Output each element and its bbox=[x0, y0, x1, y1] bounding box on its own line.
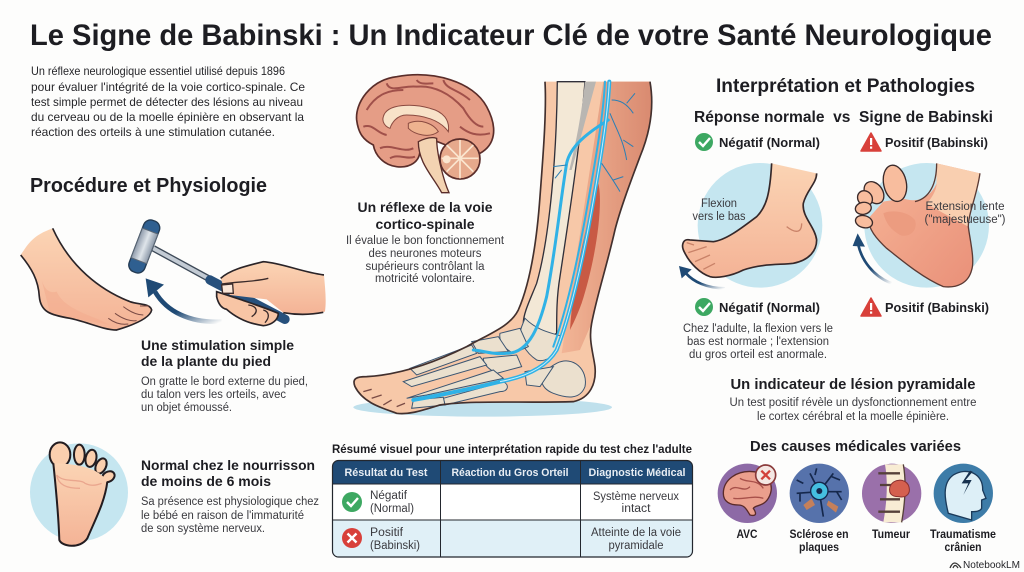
illustration: leg anatomy bbox=[353, 82, 652, 417]
heading: causes: Des causes médicales variées bbox=[750, 439, 961, 455]
status row top: Négatif (Normal) bbox=[719, 135, 820, 150]
status row bottom: Positif (Babinski) bbox=[885, 300, 989, 315]
text: simple stimulation bbox=[141, 337, 308, 414]
labels: causes: crânien bbox=[944, 542, 982, 554]
credit: NotebookLM: NotebookLM bbox=[963, 560, 1020, 571]
text: simple stimulation: de la plante du pied bbox=[141, 353, 271, 369]
text: normal in infants: Normal chez le nourrisson bbox=[141, 457, 315, 473]
illustration: baby foot bbox=[30, 442, 128, 546]
nerves bbox=[413, 82, 609, 400]
table header: Résultat du Test bbox=[344, 467, 428, 479]
text: adult response: Chez l'adulte, la flexion vers le bbox=[683, 323, 833, 335]
icon: red warning bbox=[861, 133, 881, 151]
table header bbox=[344, 467, 686, 479]
labels: causes: Tumeur bbox=[872, 529, 910, 541]
text: corticospinal reflex: motricité volontaire. bbox=[375, 273, 475, 285]
row: negative: intact bbox=[622, 503, 651, 515]
red muscle strip bbox=[570, 183, 600, 330]
tibia bbox=[523, 82, 585, 336]
labels: causes: plaques bbox=[799, 542, 839, 554]
text: corticospinal reflex: cortico-spinale bbox=[376, 216, 475, 232]
text: normal in infants: Sa présence est physiologique chez bbox=[141, 496, 319, 508]
intro text block: test simple permet de détecter des lésions au niveau bbox=[31, 95, 303, 109]
row: negative: (Normal) bbox=[370, 503, 414, 515]
intro text block: réaction des orteils à une stimulation cutanée. bbox=[31, 125, 275, 139]
label: slow extension: ("majestueuse") bbox=[924, 214, 1006, 226]
text: normal in infants: le bébé en raison de l'immaturité bbox=[141, 510, 304, 522]
labels: causes: Sclérose en bbox=[790, 529, 848, 541]
text: adult response bbox=[683, 323, 833, 361]
foot bones bbox=[403, 318, 585, 408]
text: simple stimulation: un objet émoussé. bbox=[141, 402, 232, 414]
illustration: babinski extension foot bbox=[853, 163, 989, 288]
text: simple stimulation: du talon vers les orteils, avec bbox=[141, 389, 286, 401]
title: Le Signe de Babinski : Un Indicateur Clé de votre Santé Neurologique bbox=[30, 19, 992, 52]
text: simple stimulation: Une stimulation simple bbox=[141, 337, 294, 353]
text: corticospinal reflex: supérieurs contrôlant la bbox=[366, 261, 485, 273]
labels: causes: Traumatisme bbox=[930, 529, 996, 541]
row: positive: (Babinski) bbox=[370, 540, 420, 552]
heading: procedure: Procédure et Physiologie bbox=[30, 175, 267, 197]
illustration: brain bbox=[357, 75, 494, 193]
label: slow extension bbox=[924, 201, 1006, 226]
row: positive: Atteinte de la voie bbox=[591, 527, 681, 539]
text: normal in infants: de moins de 6 mois bbox=[141, 473, 271, 489]
status row bottom bbox=[695, 298, 989, 316]
table header: Réaction du Gros Orteil bbox=[452, 467, 568, 479]
intro text block: pour évaluer l'intégrité de la voie cortico-spinale. Ce bbox=[31, 80, 305, 94]
heading: normal vs babinski: Réponse normale vs Signe de Babinski bbox=[694, 109, 993, 126]
row: negative: Système nerveux bbox=[593, 491, 679, 503]
icon: green check bbox=[695, 298, 713, 316]
labels: causes: AVC bbox=[736, 529, 758, 541]
table heading: Résumé visuel pour une interprétation rapide du test chez l'adulte bbox=[332, 444, 692, 456]
text: pyramidal lesion indicator: le cortex cérébral et la moelle épinière. bbox=[757, 411, 949, 423]
icon: multiple sclerosis neuron bbox=[790, 464, 849, 523]
label: downward flexion: Flexion bbox=[701, 198, 737, 210]
icon: stroke bbox=[718, 464, 777, 523]
row: positive: pyramidale bbox=[608, 540, 664, 552]
text: corticospinal reflex: Un réflexe de la voie bbox=[358, 199, 493, 215]
text: simple stimulation: On gratte le bord externe du pied, bbox=[141, 376, 308, 388]
row: positive: Positif bbox=[370, 527, 404, 539]
text: pyramidal lesion indicator: Un indicateur de lésion pyramidale bbox=[730, 377, 976, 393]
text: corticospinal reflex bbox=[346, 199, 505, 285]
status row top bbox=[695, 133, 988, 151]
status row top: Positif (Babinski) bbox=[885, 135, 988, 150]
intro text block bbox=[31, 64, 305, 139]
label: downward flexion bbox=[692, 198, 746, 223]
icon: reflex hammer and hand bbox=[127, 218, 326, 326]
skin outline bbox=[354, 82, 652, 414]
icon: red warning bbox=[861, 298, 881, 316]
row: negative: Négatif bbox=[370, 490, 408, 502]
icon: head trauma bbox=[934, 464, 993, 523]
leg silhouette bbox=[354, 82, 652, 414]
table header: Diagnostic Médical bbox=[588, 467, 686, 479]
icon: green check bbox=[695, 133, 713, 151]
fibula bbox=[569, 82, 596, 170]
row: negative bbox=[342, 490, 679, 515]
intro text block: Un réflexe neurologique essentiel utilisé depuis 1896 bbox=[31, 64, 285, 78]
arrow: stimulation direction bbox=[146, 278, 222, 322]
text: adult response: bas est normale ; l'extension bbox=[687, 336, 829, 348]
heading: interpretation: Interprétation et Pathologies bbox=[716, 75, 975, 97]
text: adult response: du gros orteil est anormale. bbox=[689, 349, 827, 361]
text: normal in infants bbox=[141, 457, 319, 535]
illustration: normal flexion foot bbox=[679, 163, 822, 288]
text: pyramidal lesion indicator: Un test positif révèle un dysfonctionnement entre bbox=[730, 397, 976, 409]
icon: tumor on spine bbox=[862, 464, 921, 523]
labels: causes bbox=[736, 529, 996, 554]
floor shadow bbox=[353, 398, 612, 417]
calf muscle bbox=[562, 82, 652, 353]
text: normal in infants: de son système nerveux. bbox=[141, 523, 265, 535]
illustration: foot being stimulated bbox=[21, 228, 152, 330]
label: slow extension: Extension lente bbox=[926, 201, 1004, 213]
text: corticospinal reflex: des neurones moteurs bbox=[368, 248, 482, 260]
intro text block: du cerveau ou de la moelle épinière en observant la bbox=[31, 110, 304, 124]
text: corticospinal reflex: Il évalue le bon fonctionnement bbox=[346, 235, 505, 247]
text: pyramidal lesion indicator bbox=[730, 377, 976, 423]
status row bottom: Négatif (Normal) bbox=[719, 300, 820, 315]
row: positive bbox=[342, 527, 681, 552]
summary table bbox=[332, 460, 692, 557]
label: downward flexion: vers le bas bbox=[692, 211, 746, 223]
